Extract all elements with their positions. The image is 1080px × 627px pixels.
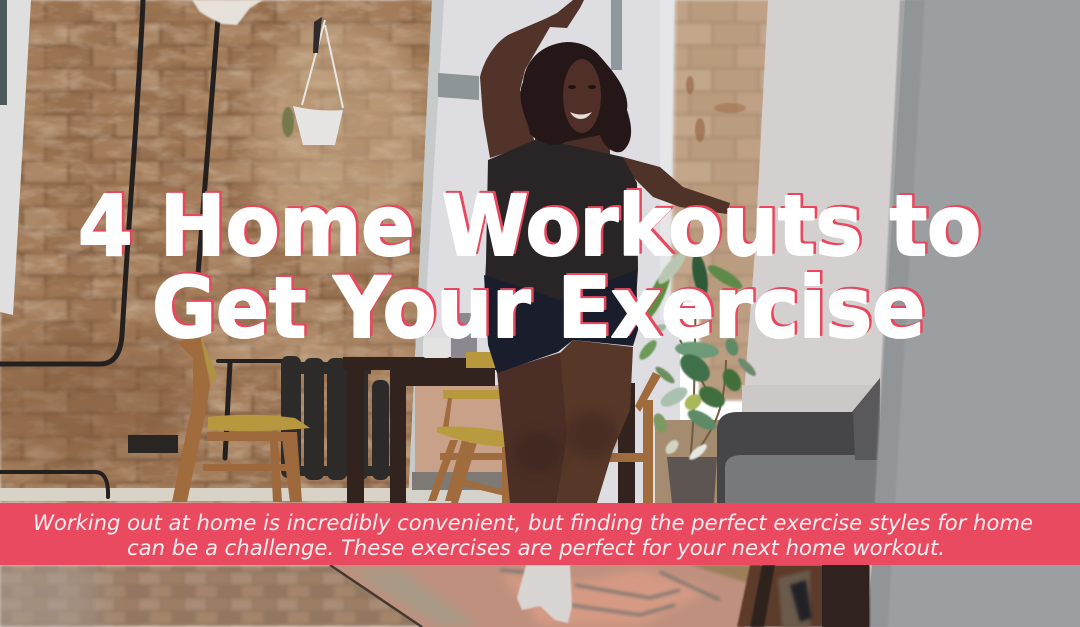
hair bbox=[520, 42, 631, 152]
chest bbox=[535, 120, 610, 170]
rear chairs bbox=[428, 352, 661, 503]
pipes bbox=[0, 0, 285, 497]
raised arm bbox=[480, 0, 584, 158]
rug bbox=[330, 565, 760, 627]
chair seat bbox=[208, 415, 310, 431]
hanging planter bbox=[282, 17, 343, 145]
chair backrest bbox=[200, 334, 217, 385]
blurred foreground wall bbox=[868, 0, 1080, 627]
intro banner bbox=[0, 503, 1080, 565]
black top bbox=[484, 140, 638, 318]
left leg bbox=[497, 352, 568, 503]
dining table bbox=[343, 357, 635, 503]
white wall bbox=[742, 0, 905, 420]
title bbox=[78, 175, 984, 357]
chandelier bbox=[192, 0, 263, 25]
wooden chair bbox=[172, 334, 310, 502]
chair frame bbox=[172, 334, 210, 502]
skirting bbox=[0, 488, 412, 501]
right leg bbox=[557, 340, 633, 503]
title text in white: Get Your Exercise bbox=[152, 259, 925, 357]
woman dancing bbox=[480, 0, 730, 623]
shorts bbox=[484, 270, 638, 373]
foreground furniture bbox=[737, 565, 870, 627]
bright doorway and window bbox=[408, 0, 680, 505]
wood floor bbox=[0, 555, 430, 627]
title shadow in red: Get Your Exercise bbox=[154, 257, 928, 355]
white shoes bbox=[517, 565, 572, 623]
mug and bag on the table bbox=[423, 313, 477, 358]
radiator bbox=[281, 356, 406, 480]
outlet bbox=[128, 435, 178, 453]
brick wall, left bbox=[0, 0, 440, 503]
potted plant bbox=[636, 249, 758, 503]
intro text: Working out at home is incredibly convenient, but finding the perfect exercise styles for home bbox=[33, 511, 1033, 535]
title shadow in red: 4 Home Workouts to bbox=[80, 175, 984, 273]
face bbox=[563, 59, 601, 133]
intro text bbox=[33, 511, 1033, 560]
left window frame bbox=[0, 0, 31, 315]
title shadow in red bbox=[80, 175, 984, 355]
right chair bbox=[606, 372, 661, 503]
lowered arm bbox=[623, 157, 730, 214]
intro text: can be a challenge. These exercises are perfect for your next home workout. bbox=[127, 536, 945, 560]
grey sofa bbox=[717, 378, 880, 503]
brick wall, right bbox=[655, 0, 770, 505]
title text in white: 4 Home Workouts to bbox=[78, 177, 981, 275]
title text in white bbox=[78, 177, 981, 357]
